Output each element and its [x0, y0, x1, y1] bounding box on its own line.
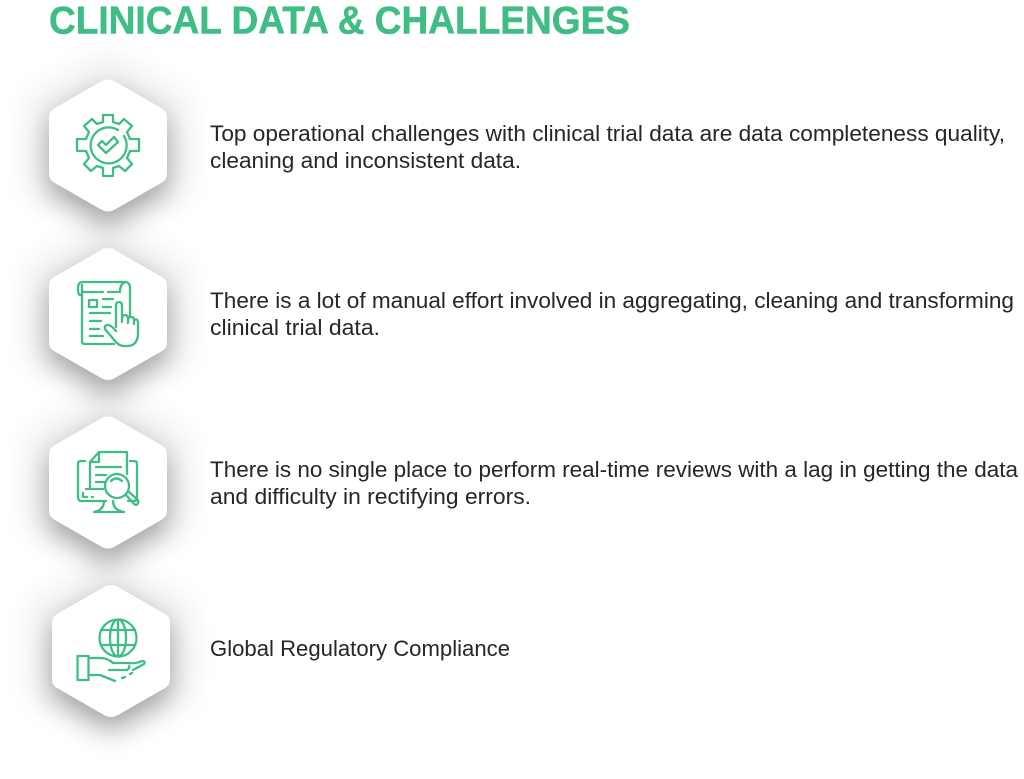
icon: document with pointing hand: [78, 282, 138, 346]
panel: manual effort challenge: [24, 220, 1014, 408]
text: operational challenges: [210, 121, 1005, 173]
panel: data quality challenge: [24, 52, 1005, 239]
icon: monitor with document and magnifier: [78, 452, 138, 512]
text: real-time reviews: and difficulty in rectifying errors.: [210, 484, 531, 509]
text: real-time reviews: There is no single place to perform real-time reviews with a lag in getting the data: [210, 457, 1018, 482]
text: manual effort: [210, 288, 1014, 340]
text: operational challenges: Top operational challenges with clinical trial data are data completeness quality,: [210, 121, 1005, 146]
text: operational challenges: cleaning and inconsistent data.: [210, 148, 521, 173]
panel: real-time review challenge: [24, 389, 1018, 576]
hexagon badge: monitor: [24, 389, 192, 576]
title: CLINICAL DATA & CHALLENGES: [49, 0, 630, 42]
text: manual effort: clinical trial data.: [210, 315, 380, 340]
hexagon badge: globe: [27, 557, 195, 745]
text: compliance: Global Regulatory Compliance: [210, 636, 510, 661]
hexagon badge: document: [24, 220, 192, 408]
icon: gear with check mark: [77, 115, 139, 176]
panel: regulatory compliance: [27, 557, 510, 745]
icon: hand holding globe: [78, 620, 145, 681]
hexagon badge: gear: [24, 52, 192, 239]
text: manual effort: There is a lot of manual effort involved in aggregating, cleaning and transforming: [210, 288, 1014, 313]
text: real-time reviews: [210, 457, 1018, 509]
